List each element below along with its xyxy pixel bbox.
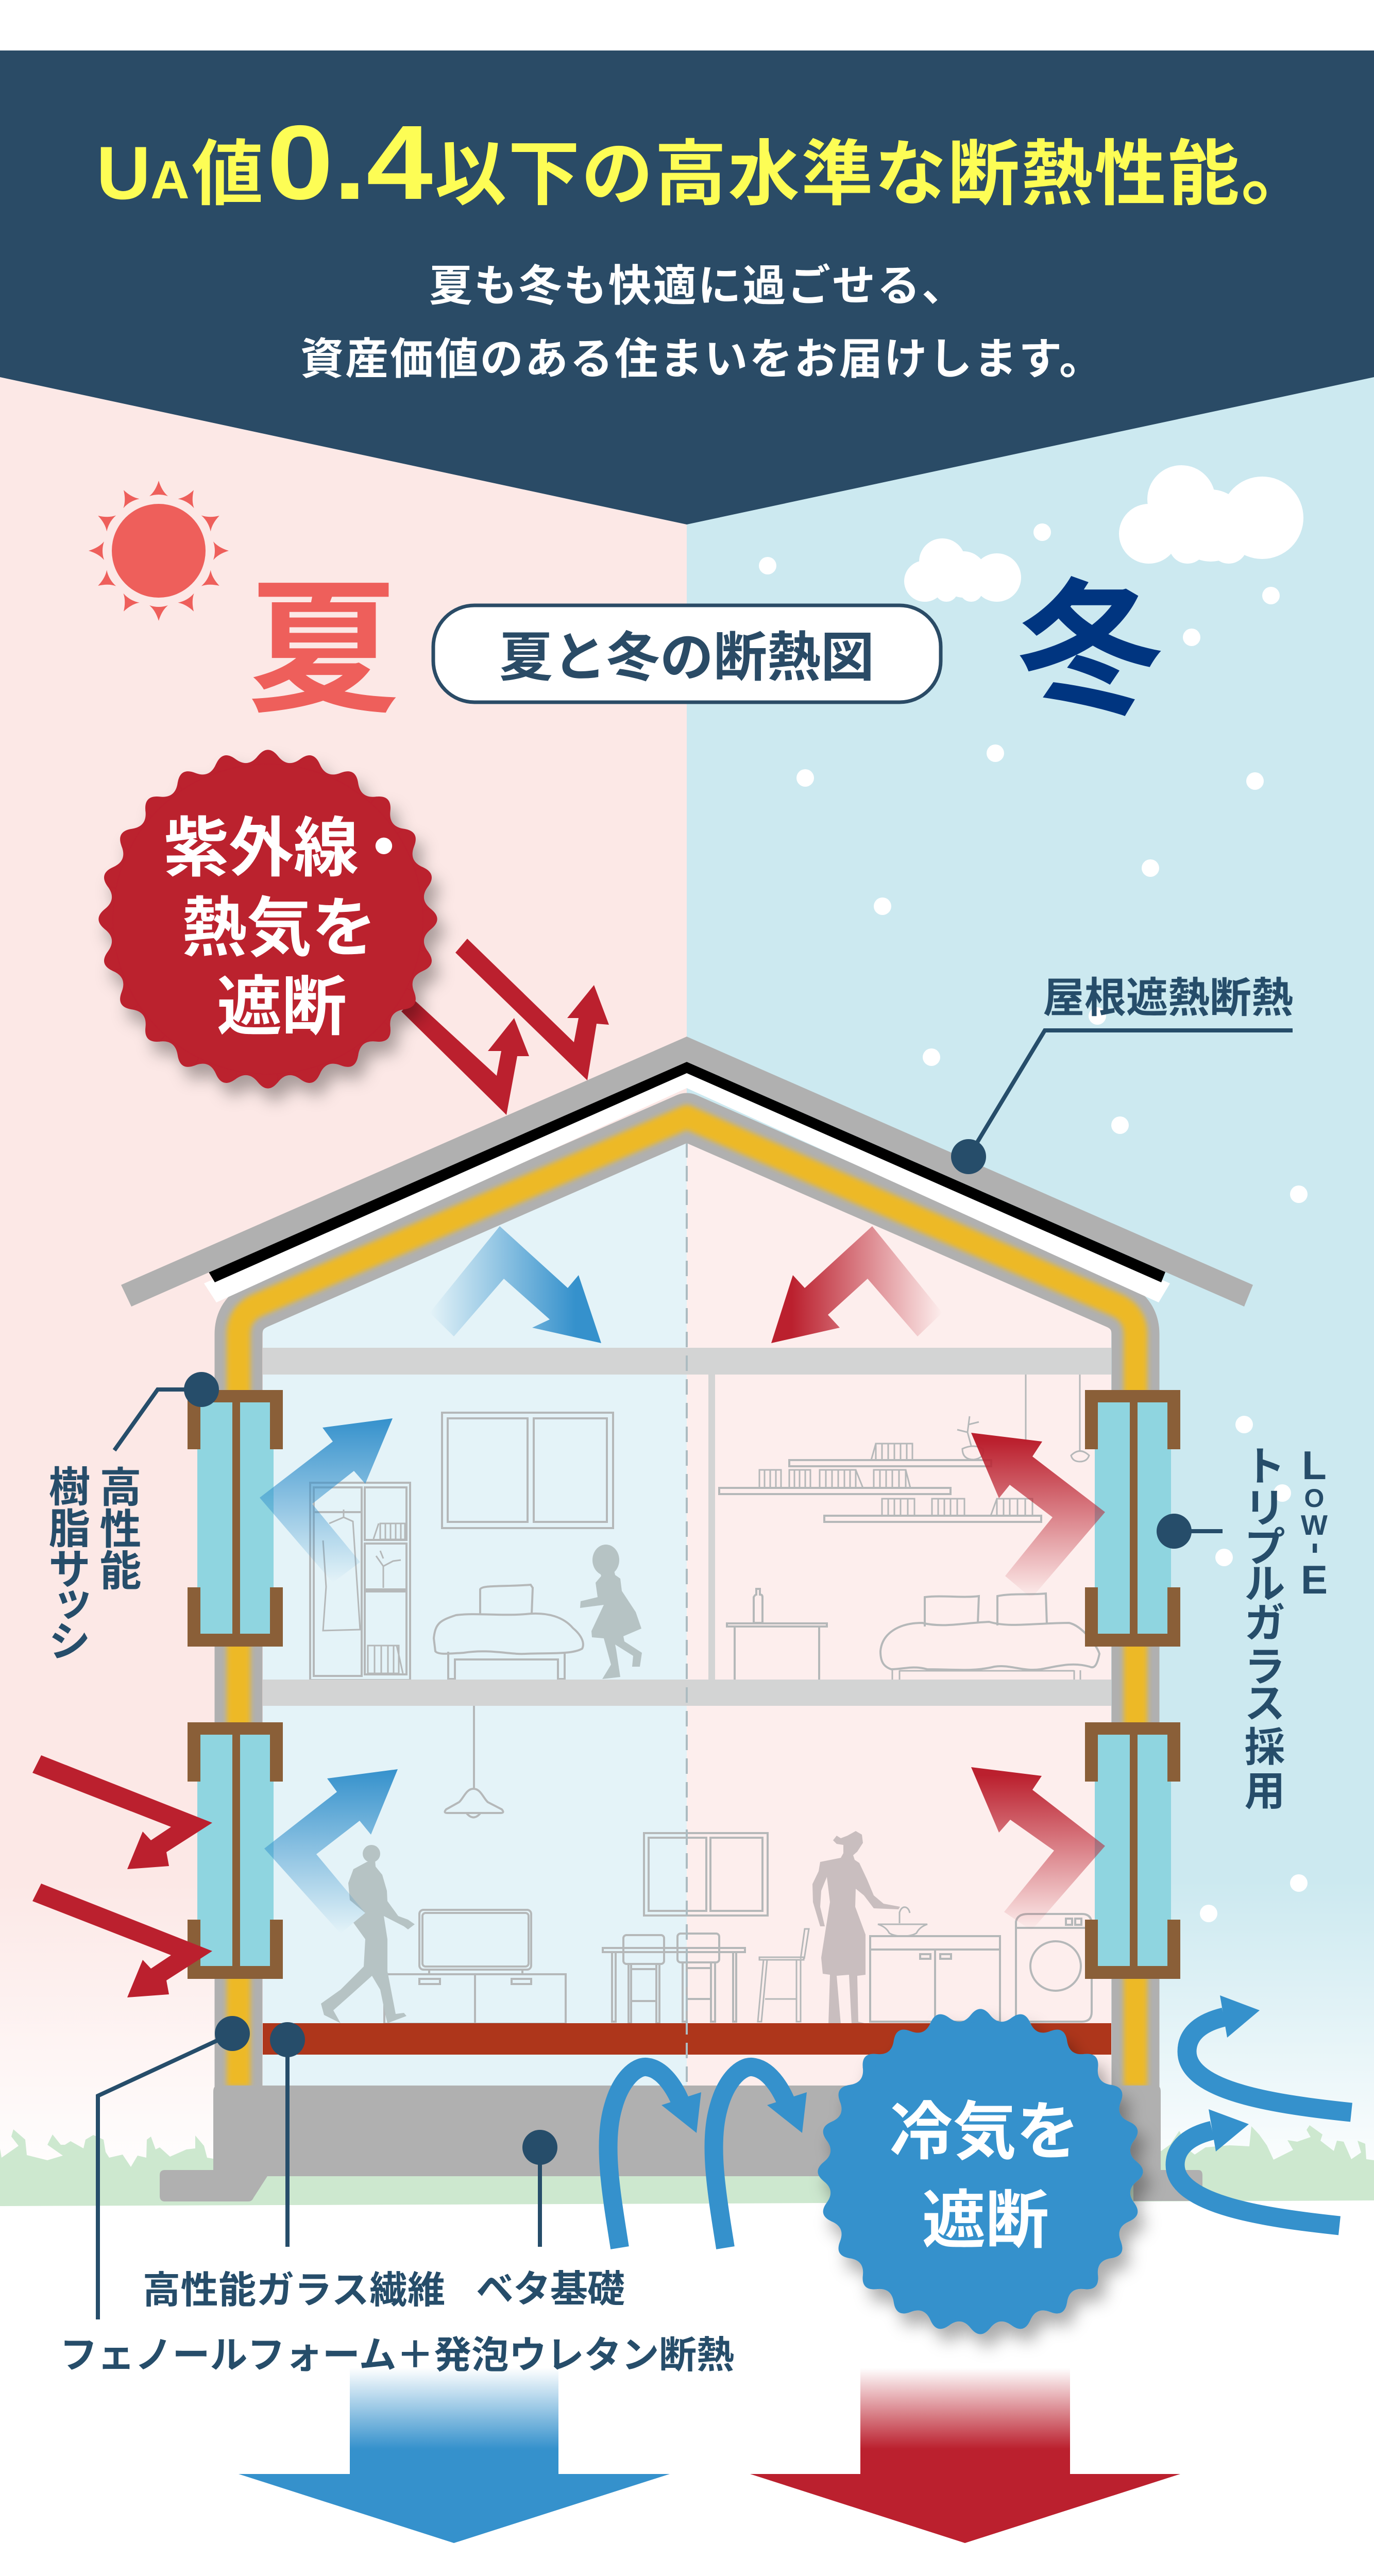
heading: summer: 夏 <box>248 532 399 741</box>
arrow: attic warm air <box>771 1226 942 1343</box>
furniture: upper left room <box>310 1413 613 1680</box>
silhouette: woman <box>812 1831 900 2024</box>
snow <box>759 523 1308 1922</box>
roof black layer <box>209 1062 1165 1282</box>
silhouette: girl <box>580 1545 642 1679</box>
arrow: reflected heat right <box>455 939 609 1080</box>
callout: roof insulation <box>951 964 1293 1174</box>
badge: cold air blocked <box>816 2007 1145 2336</box>
arrow: attic cool air <box>430 1226 601 1343</box>
arrow: lower left cool air <box>264 1769 398 1934</box>
subtitle: 資産価値のある住まいをお届けします。 <box>300 325 1102 387</box>
badge: UV and heat blocked: 熱気を <box>182 876 377 970</box>
badge: UV and heat blocked <box>96 748 439 1091</box>
callout: glass fiber <box>143 2022 445 2314</box>
arrow: outside heat lower <box>32 1884 212 1997</box>
roof <box>121 1037 1253 1307</box>
icon: large cloud <box>1119 465 1303 564</box>
ground and grass <box>0 2125 1374 2206</box>
background: summer side <box>0 50 687 2209</box>
icon: small cloud <box>904 538 1021 602</box>
callout: phenolic foam: フェノールフォーム＋発泡ウレタン断熱 <box>60 2325 734 2379</box>
callout: resin sash: 高性能 <box>99 1454 142 1598</box>
diagram label pill: 夏と冬の断熱図 <box>499 614 874 691</box>
background: winter side <box>687 50 1374 2209</box>
title: U <box>96 131 150 215</box>
arrow: cold air curve two <box>714 2067 807 2248</box>
window: lower right <box>1085 1722 1180 1979</box>
callout: resin sash: 樹脂サッシ <box>48 1454 94 1669</box>
callout: triple glass: L <box>1302 1443 1327 1488</box>
callout: triple glass: トリプルガラス採用 <box>1245 1433 1285 1817</box>
callout: triple glass: W <box>1301 1509 1328 1541</box>
badge: cold air blocked: 遮断 <box>922 2169 1049 2261</box>
callout: slab foundation <box>476 2130 625 2313</box>
heading: winter: 冬 <box>1017 532 1163 744</box>
callout: triple glass: O <box>1304 1484 1324 1513</box>
subtitle <box>300 251 1102 387</box>
callout: triple glass: E <box>1301 1557 1328 1602</box>
icon: sun <box>89 481 229 621</box>
subtitle: 夏も冬も快適に過ごせる、 <box>429 251 965 314</box>
callout: triple glass: - <box>1298 1542 1338 1554</box>
badge: cold air blocked: 冷気を <box>889 2080 1080 2172</box>
furniture: upper right room <box>719 1375 1099 1683</box>
floor slab: attic <box>263 1348 1111 1375</box>
arrow: keep warm <box>750 2368 1180 2543</box>
header band <box>0 50 1374 524</box>
arrow: lower right warm air <box>971 1767 1105 1930</box>
window: upper right <box>1085 1390 1180 1647</box>
callout: triple glass <box>1157 1433 1338 1817</box>
arrow: outside heat upper <box>32 1755 212 1869</box>
roof white layer <box>204 1073 1170 1302</box>
wall and ceiling insulation <box>239 1117 1135 2087</box>
silhouette: man <box>321 1845 415 2023</box>
window: upper left <box>188 1390 283 1647</box>
arrow: upper right warm air <box>971 1433 1105 1598</box>
partition wall <box>708 1375 715 1680</box>
title <box>96 104 1313 222</box>
title: 値 <box>192 116 263 220</box>
furniture: lower right room <box>603 1833 1092 2023</box>
floor insulation <box>263 2023 1111 2055</box>
callout: glass fiber: 高性能ガラス繊維 <box>143 2260 445 2314</box>
badge: UV and heat blocked: 紫外線・ <box>164 796 416 890</box>
diagram label pill <box>433 605 941 702</box>
title: A <box>150 150 190 210</box>
title: 0.4 <box>267 104 433 222</box>
house interior <box>263 1142 1111 2087</box>
window: lower left <box>188 1722 283 1979</box>
callout: phenolic foam <box>60 2016 734 2379</box>
callout: resin sash <box>48 1372 219 1669</box>
title: 以下の高水準な断熱性能。 <box>435 116 1313 220</box>
arrow: keep cool <box>239 2368 670 2543</box>
foundation <box>160 2086 1202 2201</box>
arrow: upper left cool air <box>260 1418 393 1583</box>
arrow: reflected heat left <box>401 999 529 1115</box>
centre dashed line <box>686 1142 688 2087</box>
arrow: cold air swirl lower <box>1175 2109 1339 2226</box>
callout: slab foundation: ベタ基礎 <box>476 2259 625 2313</box>
floor slab: second floor <box>263 1680 1111 1706</box>
callout: roof insulation: 屋根遮熱断熱 <box>1043 964 1293 1025</box>
arrow: cold air swirl upper <box>1187 1995 1351 2112</box>
furniture: lower left room <box>384 1706 566 2024</box>
arrow: cold air curve one <box>608 2067 701 2248</box>
badge: UV and heat blocked: 遮断 <box>217 955 347 1048</box>
